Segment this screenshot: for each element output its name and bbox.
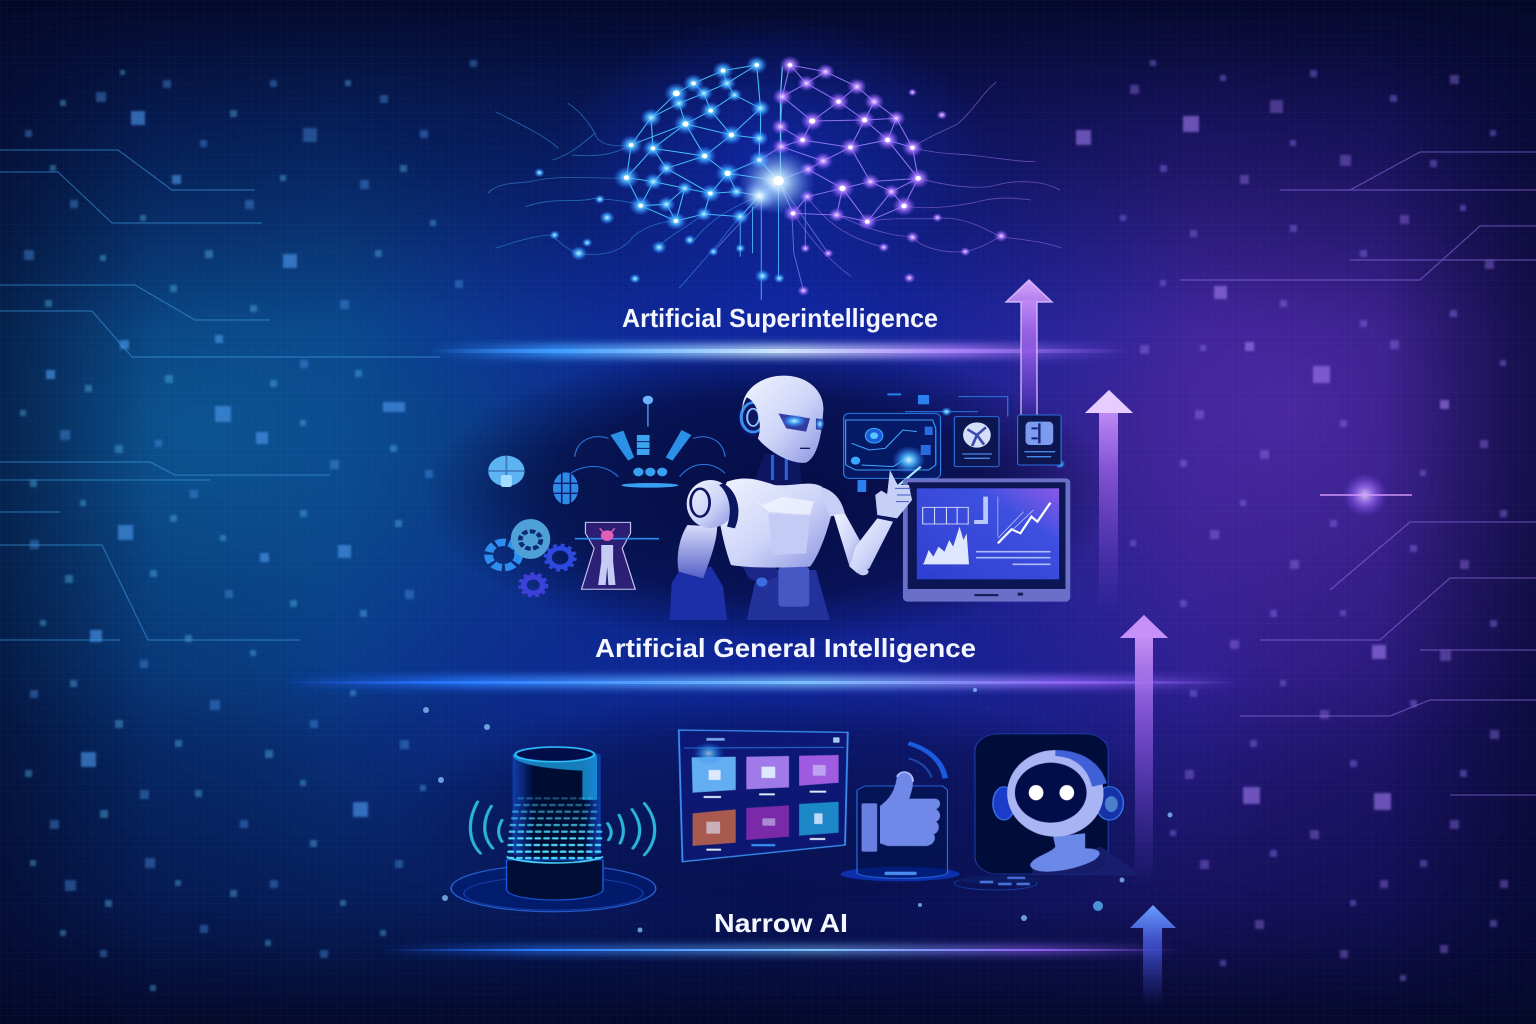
circuit lines: left (0, 150, 440, 640)
tier 1: narrow AI scene (451, 730, 1140, 912)
brain halo (560, 17, 989, 283)
sparkle particles: narrow tier (423, 688, 1172, 932)
robot: head (738, 376, 825, 463)
node cores (624, 63, 921, 224)
icon: figure in frame (575, 522, 659, 589)
node glows left (534, 56, 785, 284)
central spark (738, 148, 815, 215)
icon: thumbs up (840, 743, 960, 881)
panel: app grid tablet (679, 730, 848, 862)
heading: Narrow AI: Narrow AI (714, 908, 848, 938)
circuit lines: right (1180, 152, 1536, 795)
robot: hand (875, 470, 912, 518)
data particles: left field (20, 60, 477, 991)
tier band backdrops (400, 345, 1180, 940)
heading: Artificial Superintelligence: Artificial Superintelligence (622, 303, 938, 333)
dashboard glyphs (923, 507, 968, 524)
arrow: start (1130, 905, 1176, 1005)
panel: small card one (954, 417, 999, 467)
robot: body (670, 453, 895, 620)
tier 2: general intelligence scene (488, 376, 1070, 620)
divider line: general intelligence (280, 676, 1240, 688)
divider line: narrow AI (380, 945, 1180, 955)
panel: holographic chart (844, 393, 1065, 492)
data particles: right field (1076, 60, 1508, 981)
arrow: to general intelligence rung (1085, 390, 1133, 610)
arrow: to superintelligence (1006, 280, 1052, 425)
heading: Artificial General Intelligence: Artificial General Intelligence (595, 633, 976, 663)
divider line: superintelligence (430, 344, 1130, 358)
right hemisphere mesh (759, 65, 918, 222)
icon: smart speaker (451, 747, 656, 912)
brain network icon (488, 17, 1062, 300)
arrow: to narrow rung (1120, 615, 1168, 885)
node glows right (771, 56, 1008, 296)
panel: small card two (1018, 415, 1061, 465)
outer tendrils (488, 82, 1062, 288)
icon: gears (489, 519, 575, 596)
panel: tablet dashboard (903, 478, 1070, 602)
icon: network tree (553, 396, 725, 504)
left hemisphere mesh (627, 65, 779, 221)
icon: blue disc (488, 456, 525, 487)
icon: chatbot head (954, 734, 1140, 890)
stem lines (713, 182, 828, 300)
glow spot: right (1320, 473, 1412, 517)
